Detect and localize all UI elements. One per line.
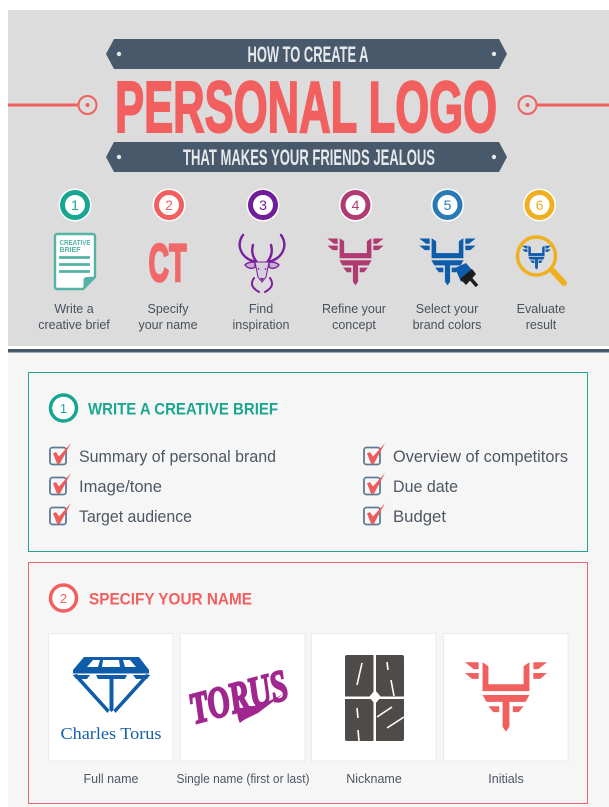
step 4 badge — [339, 188, 372, 222]
left title ornament — [8, 96, 96, 114]
title block — [8, 39, 609, 172]
wordmark: Charles Torus: Charles Torus — [60, 724, 162, 743]
step 5 label: brand colors — [413, 318, 481, 332]
icon: blue mark with paintbrush — [420, 239, 477, 286]
icon: creative brief document: CREATIVE — [60, 240, 91, 247]
step 2 badge — [152, 188, 186, 222]
step 1 badge — [58, 188, 92, 222]
checklist item: due date — [364, 473, 458, 496]
step 6 badge: 6 — [536, 197, 544, 213]
checklist item: overview of competitors: Overview of competitors — [393, 447, 568, 466]
icon: magnifier over mark — [518, 237, 564, 283]
icon: creative brief document: BRIEF — [60, 247, 81, 254]
step 6 label: result — [526, 318, 557, 332]
card: nickname — [312, 634, 436, 786]
bottom ribbon: that makes your friends jealous — [106, 142, 507, 172]
section 2 badge — [50, 585, 76, 611]
CH AZ block logo — [345, 655, 404, 741]
step 3 label: inspiration — [233, 318, 290, 332]
card: single name — [176, 634, 310, 786]
caption: single name: Single name (first or last) — [176, 772, 310, 786]
step 4 label: concept — [332, 318, 376, 332]
step 1 badge: 1 — [71, 197, 79, 213]
checklist item: summary of personal brand: Summary of personal brand — [79, 447, 276, 466]
step 4 badge: 4 — [352, 197, 360, 213]
step 3 badge: 3 — [259, 197, 267, 213]
step 6 badge — [523, 188, 556, 222]
checklist item: overview of competitors — [364, 443, 568, 466]
step 6 overview — [517, 188, 565, 332]
step 5 badge — [431, 188, 464, 222]
checklist item: image/tone: Image/tone — [79, 477, 162, 496]
section 1 badge — [50, 395, 76, 421]
right title ornament — [518, 96, 609, 114]
step 2 label: your name — [138, 318, 198, 332]
step 5 overview — [413, 188, 481, 332]
card: initials — [444, 634, 568, 786]
step 2 label: Specify — [148, 302, 189, 316]
step 2 overview — [138, 188, 198, 332]
step 1 label: creative brief — [38, 318, 110, 332]
checklist item: image/tone — [50, 473, 162, 496]
caption: initials: Initials — [488, 772, 524, 786]
step 4 label: Refine your — [322, 302, 386, 316]
checklist item: budget: Budget — [393, 507, 446, 526]
top ribbon: how to create a: HOW TO CREATE A — [248, 42, 369, 67]
section 2 badge: 2 — [60, 591, 67, 606]
divider bar — [8, 349, 609, 352]
checklist item: target audience — [50, 503, 192, 526]
step 1 overview — [38, 188, 110, 332]
diamond logo — [73, 657, 150, 713]
bottom ribbon: that makes your friends jealous: THAT MAKES YOUR FRIENDS JEALOUS — [183, 145, 435, 170]
step 5 label: Select your — [416, 302, 478, 316]
icon: creative brief document — [55, 234, 96, 289]
checklist item: target audience: Target audience — [79, 507, 192, 526]
checklist item: summary of personal brand — [50, 443, 276, 466]
step 1 label: Write a — [54, 302, 94, 316]
checklist item: budget — [364, 503, 446, 526]
panel: write a creative brief — [28, 372, 588, 552]
initials logo — [465, 662, 547, 732]
icon: refined TV mark — [328, 239, 383, 285]
section 1 heading: WRITE A CREATIVE BRIEF — [88, 400, 278, 418]
icon: CT initials: CT — [148, 234, 186, 293]
checklist item: due date: Due date — [393, 477, 458, 496]
panel: specify your name — [28, 562, 588, 804]
step 2 badge: 2 — [165, 197, 173, 213]
step 4 overview — [322, 188, 386, 332]
step 3 label: Find — [249, 302, 273, 316]
step 3 overview — [233, 188, 290, 332]
icon: deer head — [240, 235, 284, 292]
caption: full name: Full name — [84, 772, 138, 786]
caption: nickname: Nickname — [346, 772, 402, 786]
card: full name — [48, 634, 173, 786]
step 5 badge: 5 — [444, 197, 452, 213]
Torus wordmark logo — [184, 660, 293, 734]
step 3 badge — [246, 188, 280, 222]
section 1 badge: 1 — [60, 401, 67, 416]
header panel background — [8, 10, 609, 346]
Torus wordmark logo: TORUS — [184, 660, 293, 734]
lower content background — [8, 352, 609, 807]
top ribbon: how to create a — [106, 39, 507, 69]
step 6 label: Evaluate — [517, 302, 565, 316]
section 2 heading: SPECIFY YOUR NAME — [89, 590, 252, 608]
